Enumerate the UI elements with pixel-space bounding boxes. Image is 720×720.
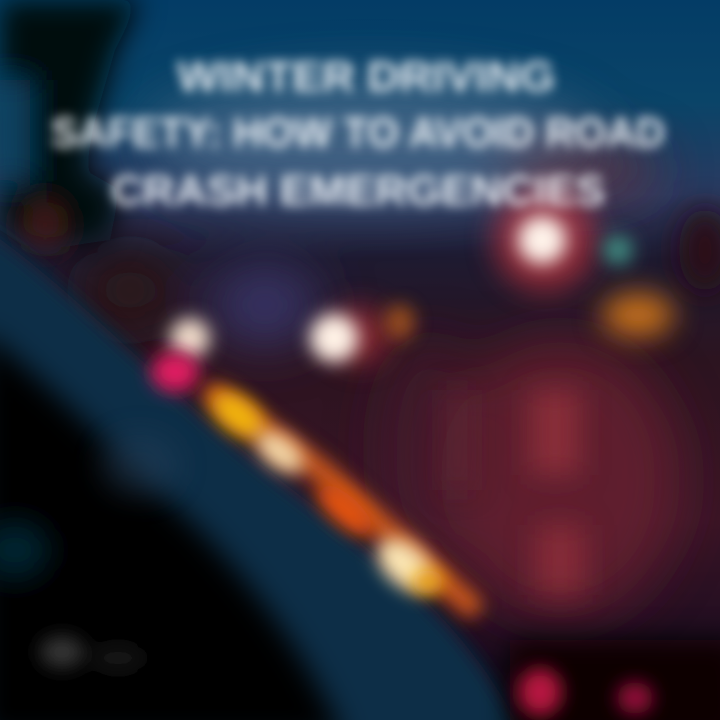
- dark trees at upper left and right: [0, 0, 720, 292]
- background glows: [80, 80, 680, 620]
- reflected red streaks on road: [445, 390, 585, 595]
- car hood silhouette: [0, 225, 525, 720]
- reflective stripe along the car edge: [204, 383, 470, 605]
- glowing street lights: [151, 188, 674, 392]
- title: CRASH EMERGENCIES: [111, 167, 605, 215]
- title: [51, 53, 665, 215]
- title: SAFETY: HOW TO AVOID ROAD: [51, 109, 665, 157]
- title: WINTER DRIVING: [177, 53, 555, 101]
- faint logo mark lower left: [40, 636, 144, 671]
- magenta lights at bottom right: [510, 640, 720, 720]
